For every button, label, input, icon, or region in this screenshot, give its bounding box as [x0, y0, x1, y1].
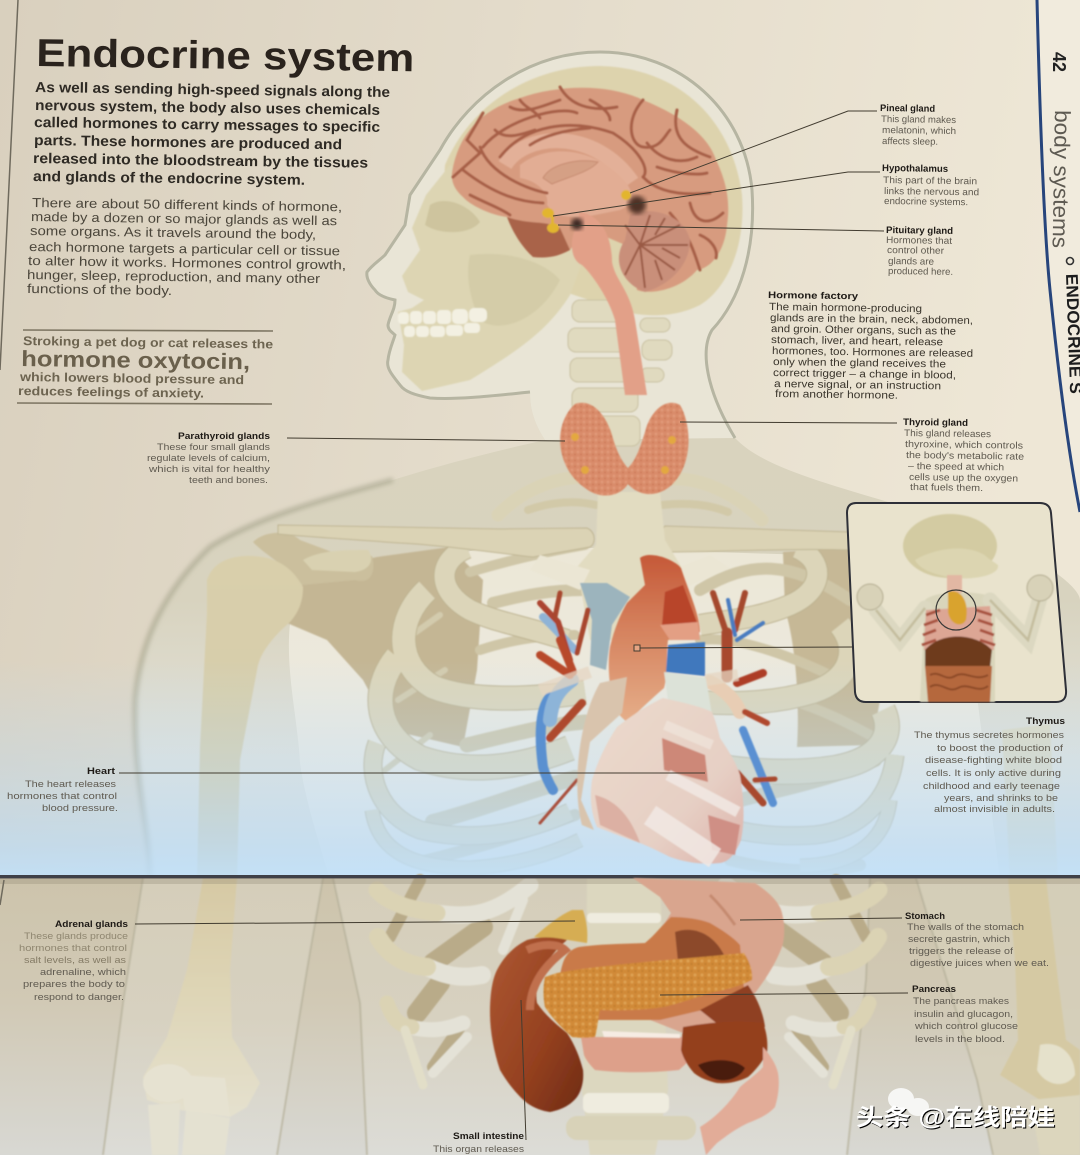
label: hypothalamus: links the nervous and [884, 186, 979, 198]
aorta [609, 555, 700, 722]
intro text [33, 80, 390, 189]
label: heart: The heart releases [25, 779, 116, 790]
label: parathyroid glands: Parathyroid glands [178, 431, 270, 442]
body text: made by a dozen or so major glands as well as [31, 209, 338, 228]
thymus inset panel [847, 503, 1066, 702]
lower spine [582, 878, 668, 1155]
baby liver [925, 636, 992, 668]
cerebellum [619, 211, 690, 292]
neck vertebrae [568, 300, 672, 446]
label: thyroid gland: that fuels them. [910, 482, 983, 494]
baby skull [903, 514, 997, 578]
label: thyroid gland: This gland releases [904, 428, 991, 440]
page fold [0, 875, 1080, 884]
label: thyroid gland: – the speed at which [908, 461, 1004, 473]
label: pituitary gland [886, 225, 953, 278]
head skin [367, 52, 753, 440]
title: Endocrine system [36, 32, 415, 80]
body text: There are about 50 different kinds of hormone, [32, 195, 342, 214]
label: thymus: The thymus secretes hormones [914, 730, 1064, 741]
back ribs right [700, 569, 875, 870]
abdominal organs [490, 878, 784, 1155]
label: stomach: Stomach [905, 911, 945, 922]
label: hypothalamus [882, 163, 979, 208]
label: pineal gland: affects sleep. [882, 136, 938, 148]
thyroid gland [560, 403, 689, 496]
intro text: parts. These hormones are produced and [34, 133, 342, 153]
intro text: and glands of the endocrine system. [33, 169, 305, 189]
section dot [1066, 258, 1074, 264]
blue edge line [1037, 0, 1080, 512]
lower ribs left [377, 880, 530, 1085]
label: thymus: cells. It is only active during [926, 768, 1061, 779]
sternum [577, 492, 682, 640]
skeleton [197, 66, 1058, 880]
stomach [590, 878, 784, 1033]
lower torso [333, 878, 870, 1155]
baby intestines [925, 666, 992, 702]
lower skeleton [143, 878, 1080, 1155]
front ribs right outline [680, 548, 895, 866]
text block: hormone factory: stomach, liver, and heart, release [771, 334, 943, 348]
callout: oxytocin: which lowers blood pressure and [19, 370, 244, 387]
label: thymus: years, and shrinks to be [944, 793, 1058, 804]
upper colon orange [559, 917, 745, 1020]
page number: 42 [1049, 52, 1069, 72]
right scapula [783, 548, 880, 747]
label: pituitary gland: Pituitary gland [886, 225, 953, 237]
label: adrenal glands: respond to danger. [34, 992, 124, 1003]
watermark: 头条 @在线陪娃 [856, 1104, 1055, 1130]
vena cava [580, 583, 630, 670]
skull and jaw [398, 165, 590, 391]
forearm bones [148, 1103, 180, 1155]
text block: hormone factory: from another hormone. [775, 388, 898, 402]
section title: body systems [1048, 110, 1075, 248]
large intestine ring [490, 937, 583, 1112]
main heart body [591, 698, 744, 864]
label: hypothalamus: endocrine systems. [884, 196, 968, 208]
label: pineal gland: melatonin, which [882, 125, 956, 137]
label: thyroid gland: Thyroid gland [903, 417, 968, 429]
baby thymus [948, 591, 967, 624]
label: adrenal glands: prepares the body to [23, 979, 125, 990]
blue light wash [0, 660, 1080, 876]
lower right arm [916, 878, 1080, 1155]
label: pancreas: Pancreas [912, 984, 956, 995]
dark stomach patch [675, 930, 725, 962]
page background [0, 0, 1080, 880]
label: stomach: The walls of the stomach [907, 922, 1024, 933]
label: thymus: childhood and early teenage [923, 781, 1060, 792]
label: pituitary gland: Hormones that [886, 235, 953, 247]
label: parathyroid glands: regulate levels of calcium, [147, 453, 270, 464]
label: hypothalamus: This part of the brain [883, 175, 977, 187]
intestine pink band [581, 1037, 690, 1072]
atrium [577, 677, 627, 830]
label: thymus [914, 716, 1065, 815]
label: parathyroid glands: teeth and bones. [189, 475, 268, 486]
page edge left [0, 0, 18, 905]
label: heart: blood pressure. [42, 803, 118, 814]
body text: functions of the body. [27, 281, 172, 298]
brain [452, 87, 728, 395]
collar ribs [498, 477, 762, 520]
baby neck [947, 575, 962, 593]
body text [27, 195, 346, 298]
body text: to alter how it works. Hormones control growth, [28, 253, 346, 272]
callout lines [119, 111, 908, 1140]
baby body skin [920, 592, 995, 702]
frontal underside [507, 217, 570, 257]
label: hypothalamus: Hypothalamus [882, 163, 948, 175]
acromion [253, 533, 373, 585]
label: pituitary gland: produced here. [888, 266, 953, 278]
label: small intestine [433, 1131, 524, 1155]
body silhouette [135, 52, 1080, 880]
label: pancreas: The pancreas makes [913, 996, 1009, 1007]
label: stomach: triggers the release of [909, 946, 1013, 957]
label: thymus: to boost the production of [937, 743, 1063, 754]
baby arms [876, 598, 1040, 640]
text block: hormone factory: hormones, too. Hormones are released [772, 345, 973, 360]
glands: pineal, hypothalamus, pituitary [542, 190, 631, 233]
icon: watermark logo [888, 1088, 929, 1116]
cartilage [530, 555, 730, 590]
text block: hormone factory: correct trigger – a change in blood, [773, 367, 956, 382]
label: thyroid gland: the body's metabolic rate [906, 450, 1024, 463]
label: adrenal glands [19, 919, 128, 1003]
baby fists [857, 584, 883, 610]
pulmonary artery blue [666, 642, 705, 676]
label: adrenal glands: adrenaline, which [40, 967, 126, 978]
right clavicle [659, 526, 850, 552]
label: heart: Heart [87, 766, 116, 777]
left scapula [287, 547, 483, 747]
label: thymus: disease-fighting white blood [925, 755, 1062, 766]
label: small intestine: Small intestine [453, 1131, 524, 1142]
label: adrenal glands: Adrenal glands [55, 919, 128, 930]
corpus callosum area [520, 151, 632, 218]
brain folds [453, 87, 723, 270]
aortic dark patch [662, 585, 698, 625]
right page margin [1037, 0, 1080, 512]
adrenal gland [534, 910, 587, 943]
heart [540, 555, 775, 864]
label: thyroid gland: cells use up the oxygen [909, 472, 1018, 485]
baby torso [924, 606, 994, 650]
elbow condyles [143, 1064, 230, 1117]
upper heart pale band [664, 672, 712, 715]
aortic arch tip [660, 622, 700, 640]
back ribs left [385, 545, 585, 862]
right kidney-shaped colon [681, 1022, 767, 1083]
body text: each hormone targets a particular cell or tissue [29, 239, 340, 258]
label: parathyroid glands: These four small glands [157, 442, 270, 453]
label: thyroid gland: thyroxine, which controls [905, 439, 1023, 452]
callout: oxytocin: reduces feelings of anxiety. [18, 384, 204, 401]
front ribs right [680, 548, 895, 866]
label: adrenal glands: hormones that control [19, 943, 127, 954]
text block: hormone factory: glands are in the brain, neck, abdomen, [770, 312, 973, 327]
teeth [398, 308, 487, 337]
body text: hunger, sleep, reproduction, and many other [27, 267, 321, 286]
label: pancreas: insulin and glucagon, [914, 1009, 1013, 1020]
intestine tail [700, 1047, 779, 1155]
label: stomach: secrete gastrin, which [908, 934, 1010, 945]
baby ribs [922, 610, 995, 645]
torso light area [289, 545, 1000, 880]
label: pancreas: which control glucose [914, 1021, 1018, 1032]
left humerus lower [143, 878, 260, 1117]
lower left arm [103, 878, 323, 1155]
pancreas [544, 953, 752, 1038]
label: adrenal glands: These glands produce [24, 931, 128, 942]
label: pineal gland: Pineal gland [880, 103, 935, 115]
callout: oxytocin: Stroking a pet dog or cat releases the [23, 334, 273, 351]
intro text: nervous system, the body also uses chemicals [35, 98, 380, 119]
label: adrenal glands: salt levels, as well as [24, 955, 126, 966]
cheek shade [468, 254, 560, 326]
left clavicle [278, 525, 594, 557]
label: heart: hormones that control [7, 791, 117, 802]
blood vessels left [540, 593, 588, 823]
label: thymus: Thymus [1026, 716, 1065, 727]
text block: hormone factory: and groin. Other organs, such as the [771, 323, 956, 338]
blood vessels right [710, 593, 775, 803]
label: pituitary gland: control other [887, 245, 944, 257]
intro text: called hormones to carry messages to specific [34, 115, 380, 136]
callout: oxytocin: hormone oxytocin, [21, 346, 250, 374]
label: parathyroid glands: which is vital for healthy [148, 464, 270, 475]
text block: hormone factory: Hormone factory [768, 290, 859, 302]
label: pineal gland: This gland makes [881, 114, 956, 126]
label: parathyroid glands [147, 431, 270, 486]
body text: some organs. As it travels around the body, [30, 223, 316, 242]
brainstem and spinal cord [572, 212, 647, 395]
label: pineal gland [880, 103, 956, 148]
label: small intestine: This organ releases [433, 1144, 524, 1155]
label: thyroid gland [903, 417, 1024, 494]
label: stomach [905, 911, 1049, 969]
label: pancreas: levels in the blood. [915, 1034, 1005, 1045]
callout: oxytocin [17, 330, 273, 404]
right forearm [1030, 1095, 1080, 1155]
label: pituitary gland: glands are [888, 256, 934, 268]
label: thymus: almost invisible in adults. [934, 804, 1055, 815]
right humerus lower [1000, 878, 1080, 1100]
text block: hormone factory: a nerve signal, or an instruction [774, 378, 941, 392]
text block: hormone factory: only when the gland receives the [773, 356, 946, 370]
intro text: released into the bloodstream by the tissues [33, 151, 368, 172]
lower page background [0, 878, 1080, 1155]
lower ribs right [726, 880, 879, 1085]
front ribs left [372, 548, 585, 868]
white bands over heart [650, 775, 738, 858]
upper right brown [700, 985, 765, 1030]
label: heart [7, 766, 118, 814]
band crossing vessels [540, 672, 738, 690]
text block: hormone factory [768, 290, 973, 402]
right arm bone [1002, 724, 1058, 880]
skull cap around brain [440, 66, 742, 315]
pale inner arc [505, 141, 632, 182]
text block: hormone factory: The main hormone-producing [769, 301, 922, 315]
dark brain cavities [628, 196, 646, 214]
label: stomach: digestive juices when we eat. [910, 958, 1049, 969]
eye socket [425, 201, 480, 232]
front ribs left outline [372, 548, 585, 868]
heart muscle pink patches [662, 738, 708, 782]
lower body edges [103, 878, 993, 1155]
left humerus [197, 556, 303, 880]
label: pancreas [912, 984, 1018, 1045]
intro text: As well as sending high-speed signals along the [35, 80, 390, 101]
